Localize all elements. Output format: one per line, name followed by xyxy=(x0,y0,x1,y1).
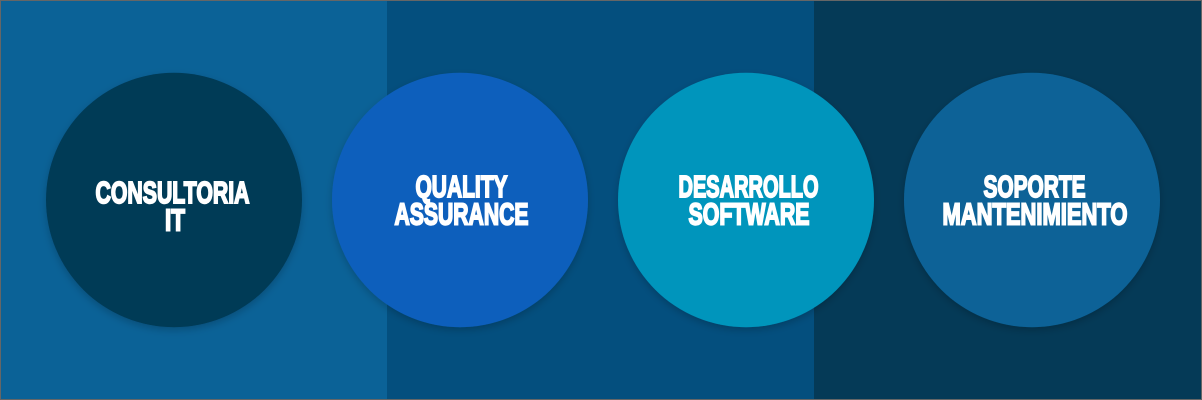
circle shape: Quality Assurance xyxy=(332,73,588,327)
label: Desarrollo Software: SOFTWARE xyxy=(688,196,810,232)
circle: Quality Assurance xyxy=(332,73,588,327)
label: Consultoria IT xyxy=(96,175,250,238)
panel: left background band xyxy=(0,0,387,400)
circle shape: Soporte Mantenimiento xyxy=(904,73,1160,327)
panel: right background band xyxy=(814,0,1202,400)
circle: Consultoria IT xyxy=(46,73,302,327)
label: Soporte Mantenimiento: MANTENIMIENTO xyxy=(942,196,1128,232)
circle shape: Consultoria IT xyxy=(46,73,302,327)
circle: Soporte Mantenimiento xyxy=(904,73,1160,327)
circle shape: Desarrollo Software xyxy=(618,73,874,327)
circle: Desarrollo Software xyxy=(618,73,874,327)
label: Consultoria IT: IT xyxy=(165,202,185,238)
label: Quality Assurance xyxy=(394,169,528,232)
label: Quality Assurance: QUALITY xyxy=(416,169,508,204)
label: Soporte Mantenimiento: SOPORTE xyxy=(984,169,1086,204)
panel: middle background band xyxy=(387,0,814,400)
label: Quality Assurance: ASSURANCE xyxy=(394,196,528,232)
label: Consultoria IT: CONSULTORIA xyxy=(96,175,250,210)
label: Soporte Mantenimiento xyxy=(942,169,1128,232)
label: Desarrollo Software xyxy=(678,169,818,232)
label: Desarrollo Software: DESARROLLO xyxy=(678,169,818,204)
